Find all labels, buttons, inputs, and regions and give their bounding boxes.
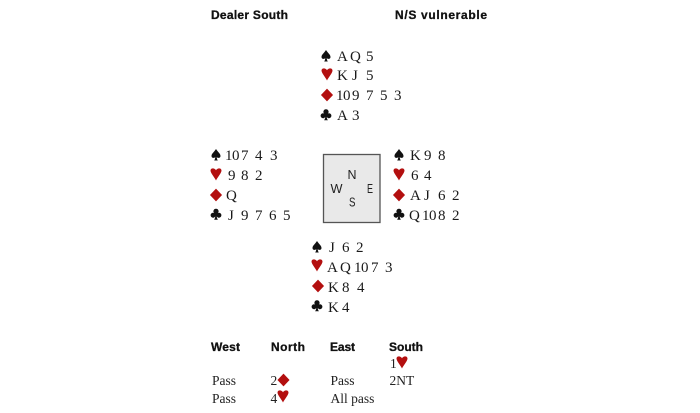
bidding column: South: 2NT [390,373,415,388]
compass table: E [367,181,373,196]
heading: vulnerability: N/S vulnerable [395,8,487,22]
hand: East [393,148,460,224]
hand: East: K98 [410,148,446,164]
bidding column: North [270,340,305,406]
hand: South: AQ1073 [327,260,392,276]
hand: South [312,240,392,316]
bidding column: West: Pass [212,373,236,388]
compass table [324,154,380,222]
bidding column: East: Pass [330,373,355,388]
bidding column: East [330,340,374,406]
bidding column: North: 2 [270,373,277,388]
hand: East: 64 [411,168,432,184]
hand: West: 10743 [225,148,278,164]
hand: East: Q1082 [409,208,460,224]
bidding column: South: 1 [390,356,397,371]
hand: North: A3 [337,108,360,124]
hand: North: AQ5 [337,49,374,65]
bidding column: East: All pass [330,391,374,406]
bidding column: West: West [211,340,240,354]
bidding column: South [389,340,423,388]
hand: South: J62 [329,240,364,256]
bidding column: North: 4 [270,391,278,406]
compass table: W [330,181,343,196]
bidding column: South: South [389,340,423,354]
hand: West: Q [226,188,237,204]
hand: North [321,49,402,124]
hand: North: KJ5 [337,68,374,84]
hand: North: 109753 [336,88,402,104]
bidding column: West: Pass [212,391,236,406]
bidding column: West [211,340,240,406]
hand: East: AJ62 [410,188,460,204]
hand: West [210,148,290,224]
bidding column: East: East [330,340,355,354]
hand: West: 982 [228,168,262,184]
heading: dealer: Dealer South [211,8,288,22]
hand: South: K84 [328,280,365,296]
compass table: S [349,194,356,210]
bidding table [211,340,423,406]
hand: West: J9765 [228,208,290,224]
hand: South: K4 [328,300,350,316]
compass table: N [348,167,356,182]
bidding column: North: North [271,340,305,354]
